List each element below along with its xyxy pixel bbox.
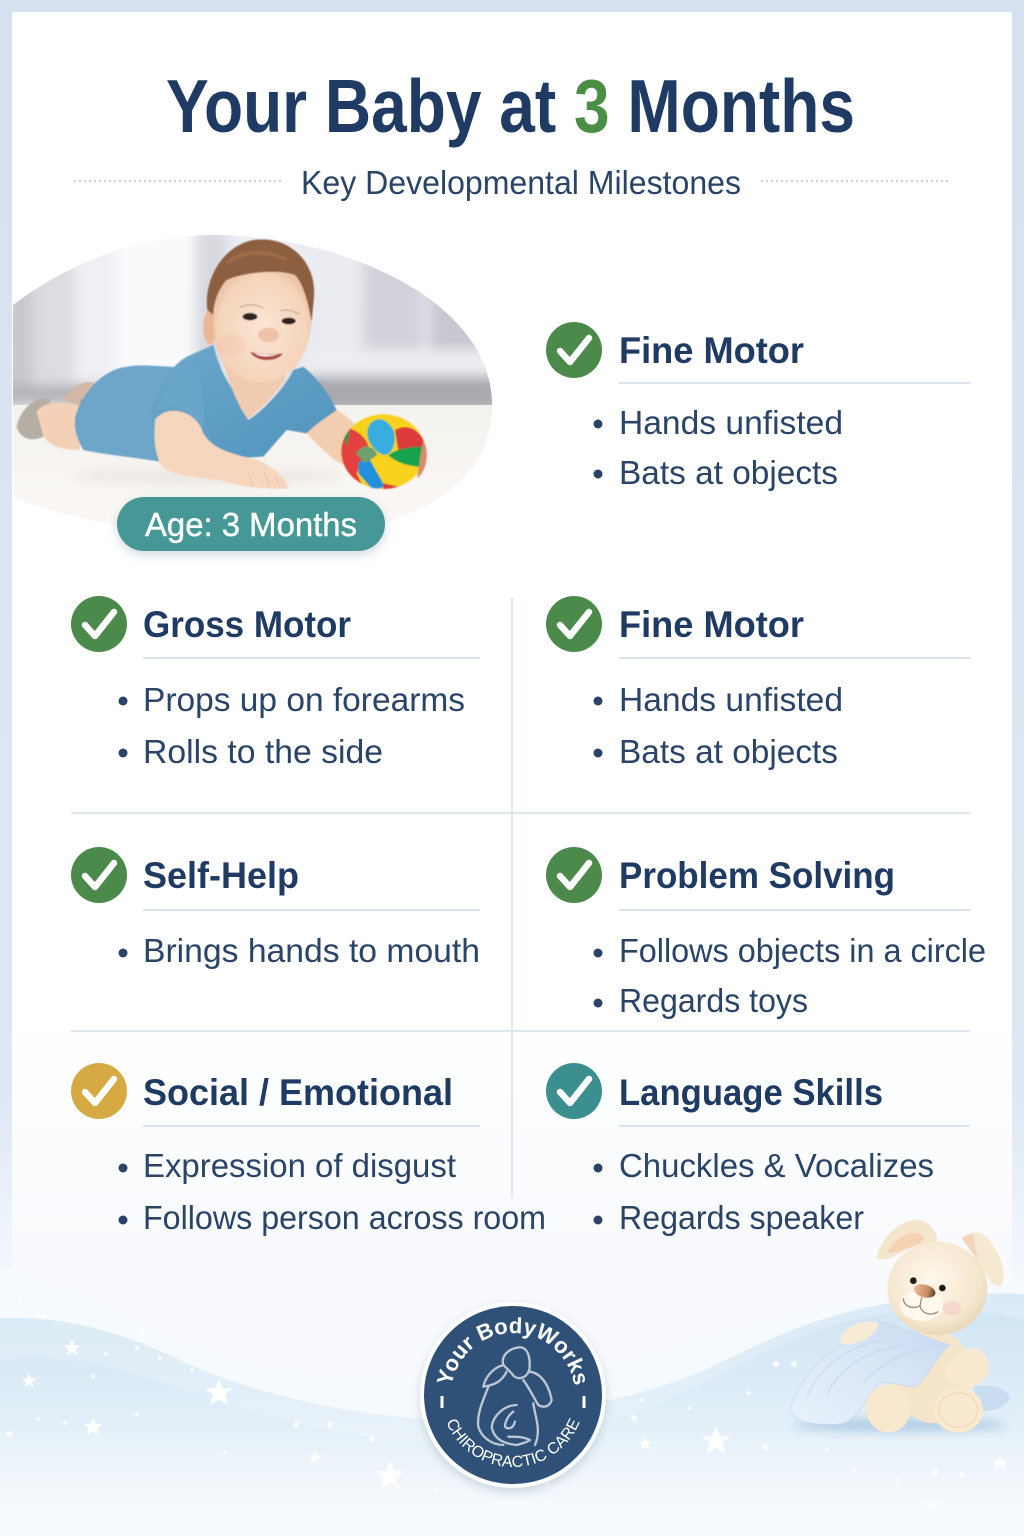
age badge: Age: 3 Months bbox=[145, 506, 357, 543]
milestone: fine motor (top): Bats at objects bbox=[619, 454, 838, 491]
age badge bbox=[117, 497, 385, 551]
milestone: gross motor: Gross Motor bbox=[143, 604, 351, 645]
milestone: problem solving: Problem Solving bbox=[619, 855, 895, 896]
baby bbox=[17, 239, 428, 492]
logo badge bbox=[416, 1306, 610, 1496]
milestone: social / emotional: Social / Emotional bbox=[143, 1072, 453, 1113]
plush bunny with blanket bbox=[790, 1220, 1010, 1433]
subtitle: Key Developmental Milestones bbox=[301, 164, 741, 201]
rug bbox=[13, 405, 492, 525]
milestone: self-help: Self-Help bbox=[143, 855, 299, 896]
milestone: problem solving bbox=[546, 847, 986, 1019]
milestone: fine motor (top): Fine Motor bbox=[619, 330, 804, 371]
logo badge: Your BodyWorks bbox=[436, 1317, 585, 1384]
milestone: gross motor bbox=[71, 596, 480, 770]
milestone: fine motor (grid): Hands unfisted bbox=[619, 681, 843, 718]
milestone: fine motor (grid): Fine Motor bbox=[619, 604, 804, 645]
milestone: self-help: Brings hands to mouth bbox=[143, 932, 480, 969]
milestone: gross motor: Props up on forearms bbox=[143, 681, 465, 718]
logo badge: CHIROPRACTIC CARE bbox=[448, 1418, 580, 1468]
milestone: fine motor (grid): Bats at objects bbox=[619, 733, 838, 770]
milestone: problem solving: Regards toys bbox=[619, 982, 808, 1019]
title: Your Baby at 3 Months bbox=[166, 64, 855, 148]
milestone: language skills bbox=[546, 1063, 970, 1236]
background waves and stars bbox=[0, 1265, 1024, 1536]
milestone: self-help bbox=[71, 847, 480, 969]
grid dividers bbox=[71, 598, 970, 1198]
milestone: fine motor (grid) bbox=[546, 596, 970, 770]
milestone: fine motor (top): Hands unfisted bbox=[619, 404, 843, 441]
blurred room background bbox=[13, 235, 492, 405]
logo figure: parent and babies bbox=[478, 1347, 552, 1445]
milestone: fine motor (top) bbox=[546, 322, 970, 491]
milestone: social / emotional: Follows person across room bbox=[143, 1199, 546, 1236]
milestone: language skills: Language Skills bbox=[619, 1072, 883, 1113]
milestone: language skills: Regards speaker bbox=[619, 1199, 864, 1236]
milestone: gross motor: Rolls to the side bbox=[143, 733, 383, 770]
milestone: language skills: Chuckles & Vocalizes bbox=[619, 1147, 934, 1184]
milestone: problem solving: Follows objects in a circle bbox=[619, 932, 986, 969]
baby photo bbox=[0, 227, 500, 535]
milestone: social / emotional bbox=[71, 1063, 546, 1236]
milestone: social / emotional: Expression of disgust bbox=[143, 1147, 456, 1184]
